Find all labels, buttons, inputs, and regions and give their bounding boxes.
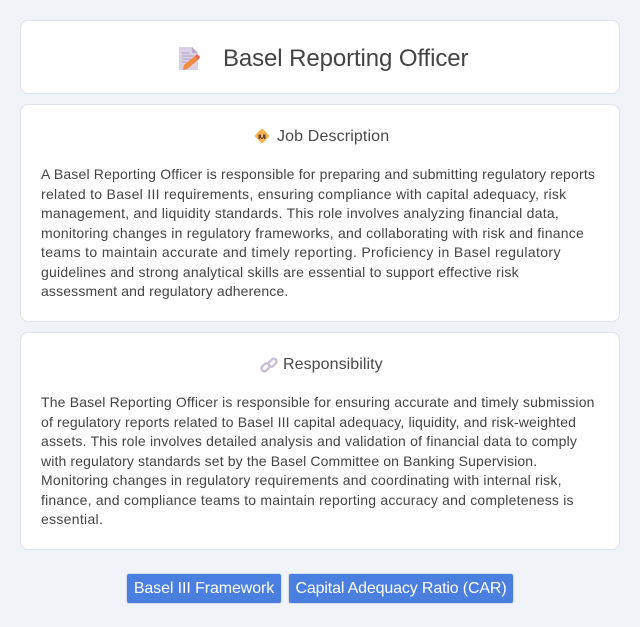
icon: diamond badge bbox=[255, 128, 269, 144]
text: job description body: management, and liquidity standards. This role involves analyzing financial data, bbox=[41, 205, 559, 221]
text: job description body: monitoring changes in regulatory frameworks, and collaborating with risk and finance bbox=[41, 224, 584, 240]
tag: Capital Adequacy Ratio: Capital Adequacy Ratio (CAR) bbox=[295, 580, 506, 597]
text: responsibility body: finance, and compliance teams to maintain reporting accuracy and completeness is bbox=[41, 492, 574, 508]
heading: job description: Job Description bbox=[277, 128, 389, 145]
text: responsibility body: Monitoring changes in regulatory requirements and coordinating with internal risk, bbox=[41, 472, 562, 488]
text: responsibility body: with regulatory standards set by the Basel Committee on Banking Supervision. bbox=[41, 452, 537, 468]
tag: Capital Adequacy Ratio bbox=[288, 573, 514, 604]
panel: responsibility bbox=[20, 332, 620, 550]
tag: Basel III Framework: Basel III Framework bbox=[134, 580, 274, 597]
text: job description body bbox=[41, 166, 595, 299]
panel: title card bbox=[20, 20, 620, 94]
panel: job description bbox=[20, 104, 620, 322]
text: responsibility body: essential. bbox=[41, 511, 103, 527]
title: Basel Reporting Officer bbox=[223, 45, 468, 72]
icon: chain link bbox=[260, 358, 278, 372]
text: job description body: assessment and regulatory adherence. bbox=[41, 283, 288, 299]
text: job description body: A Basel Reporting Officer is responsible for preparing and submitting regulatory reports bbox=[41, 166, 595, 182]
text: job description body: guidelines and strong analytical skills are essential to support effective risk bbox=[41, 264, 519, 280]
heading: responsibility: Responsibility bbox=[283, 356, 383, 373]
text: responsibility body bbox=[41, 394, 595, 527]
icon: document with pencil bbox=[179, 47, 200, 70]
text: responsibility body: The Basel Reporting Officer is responsible for ensuring accurate and timely submission bbox=[41, 394, 595, 410]
tag: Basel III Framework bbox=[126, 573, 282, 604]
text: responsibility body: assets. This role involves detailed analysis and validation of financial data to comply bbox=[41, 433, 577, 449]
text: job description body: related to Basel III requirements, ensuring compliance with capital adequacy, risk bbox=[41, 186, 566, 202]
text: job description body: teams to maintain accurate and timely reporting. Proficiency in Basel regulatory bbox=[41, 244, 561, 260]
text: responsibility body: of regulatory reports related to Basel III capital adequacy, liquidity, and risk-weighted bbox=[41, 414, 576, 430]
